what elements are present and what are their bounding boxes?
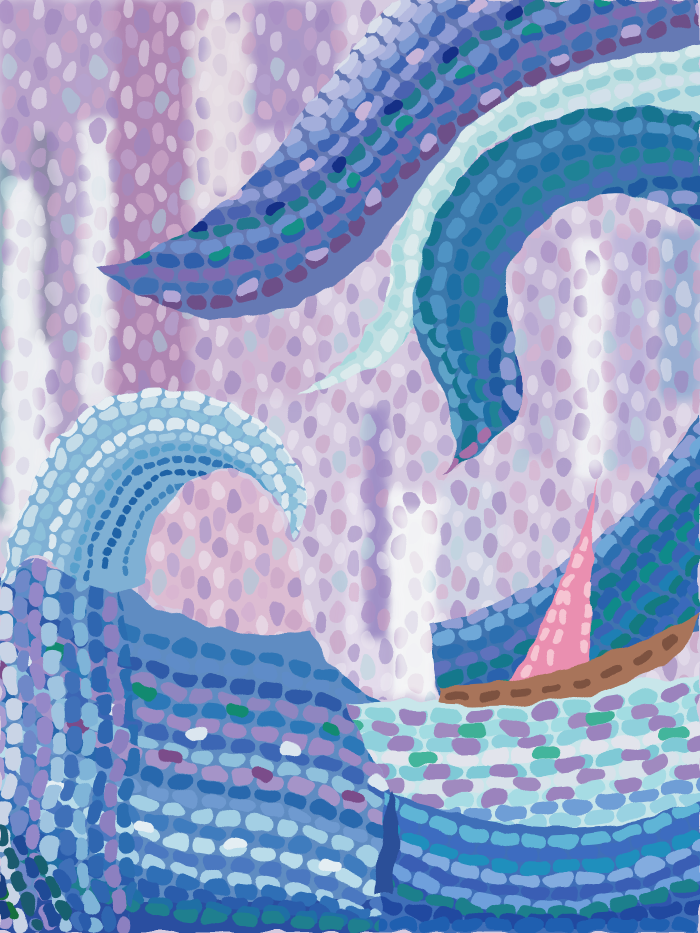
column dabs (0, 550, 140, 925)
bottom left dark corner (0, 830, 88, 925)
deep sea dabs (380, 796, 700, 925)
upper wave (96, 0, 700, 320)
interior base (144, 470, 311, 636)
pale sea dabs (340, 684, 700, 829)
deep sea base (370, 780, 700, 933)
sea left descending column (0, 550, 140, 925)
pale band base (298, 44, 700, 395)
dark dabs (0, 830, 88, 925)
interior dabs (142, 471, 311, 636)
deep right sea (370, 780, 700, 933)
crest base (0, 388, 308, 593)
rain dabs in upper left and centre (0, 0, 700, 700)
right wave base (430, 415, 700, 696)
second wave dark band (412, 104, 700, 475)
vertical stripes: curtain of rain (0, 0, 700, 695)
right wave dabs (430, 422, 700, 696)
crest dabs (0, 392, 306, 600)
upper wave accents (90, 0, 700, 297)
boat (440, 478, 700, 705)
hull (440, 612, 700, 705)
pale right sea (346, 676, 700, 828)
pale sea accents (340, 684, 700, 801)
dark band base (412, 104, 700, 475)
pale band dabs (298, 45, 700, 394)
upper wave dabs (90, 0, 700, 304)
pale sea base (346, 676, 700, 828)
sail highlights (525, 540, 590, 672)
sail (505, 478, 596, 685)
sea bottom base (0, 900, 420, 933)
sea left body (0, 562, 390, 933)
left wave interior (145, 470, 311, 636)
right wave behind boat (430, 415, 700, 696)
second wave pale band (298, 44, 700, 395)
hull dabs (450, 635, 680, 696)
left wave crest and curl (0, 388, 308, 593)
sea dabs (0, 536, 385, 926)
wave tip dabs (448, 430, 490, 470)
pale sea green accents (352, 711, 690, 768)
bright stripes over dabs (6, 20, 602, 695)
crest ridge (375, 790, 398, 895)
dark band dabs (412, 104, 700, 472)
upper wave base (96, 0, 700, 320)
sea base (0, 562, 385, 902)
sea accents (0, 642, 389, 872)
